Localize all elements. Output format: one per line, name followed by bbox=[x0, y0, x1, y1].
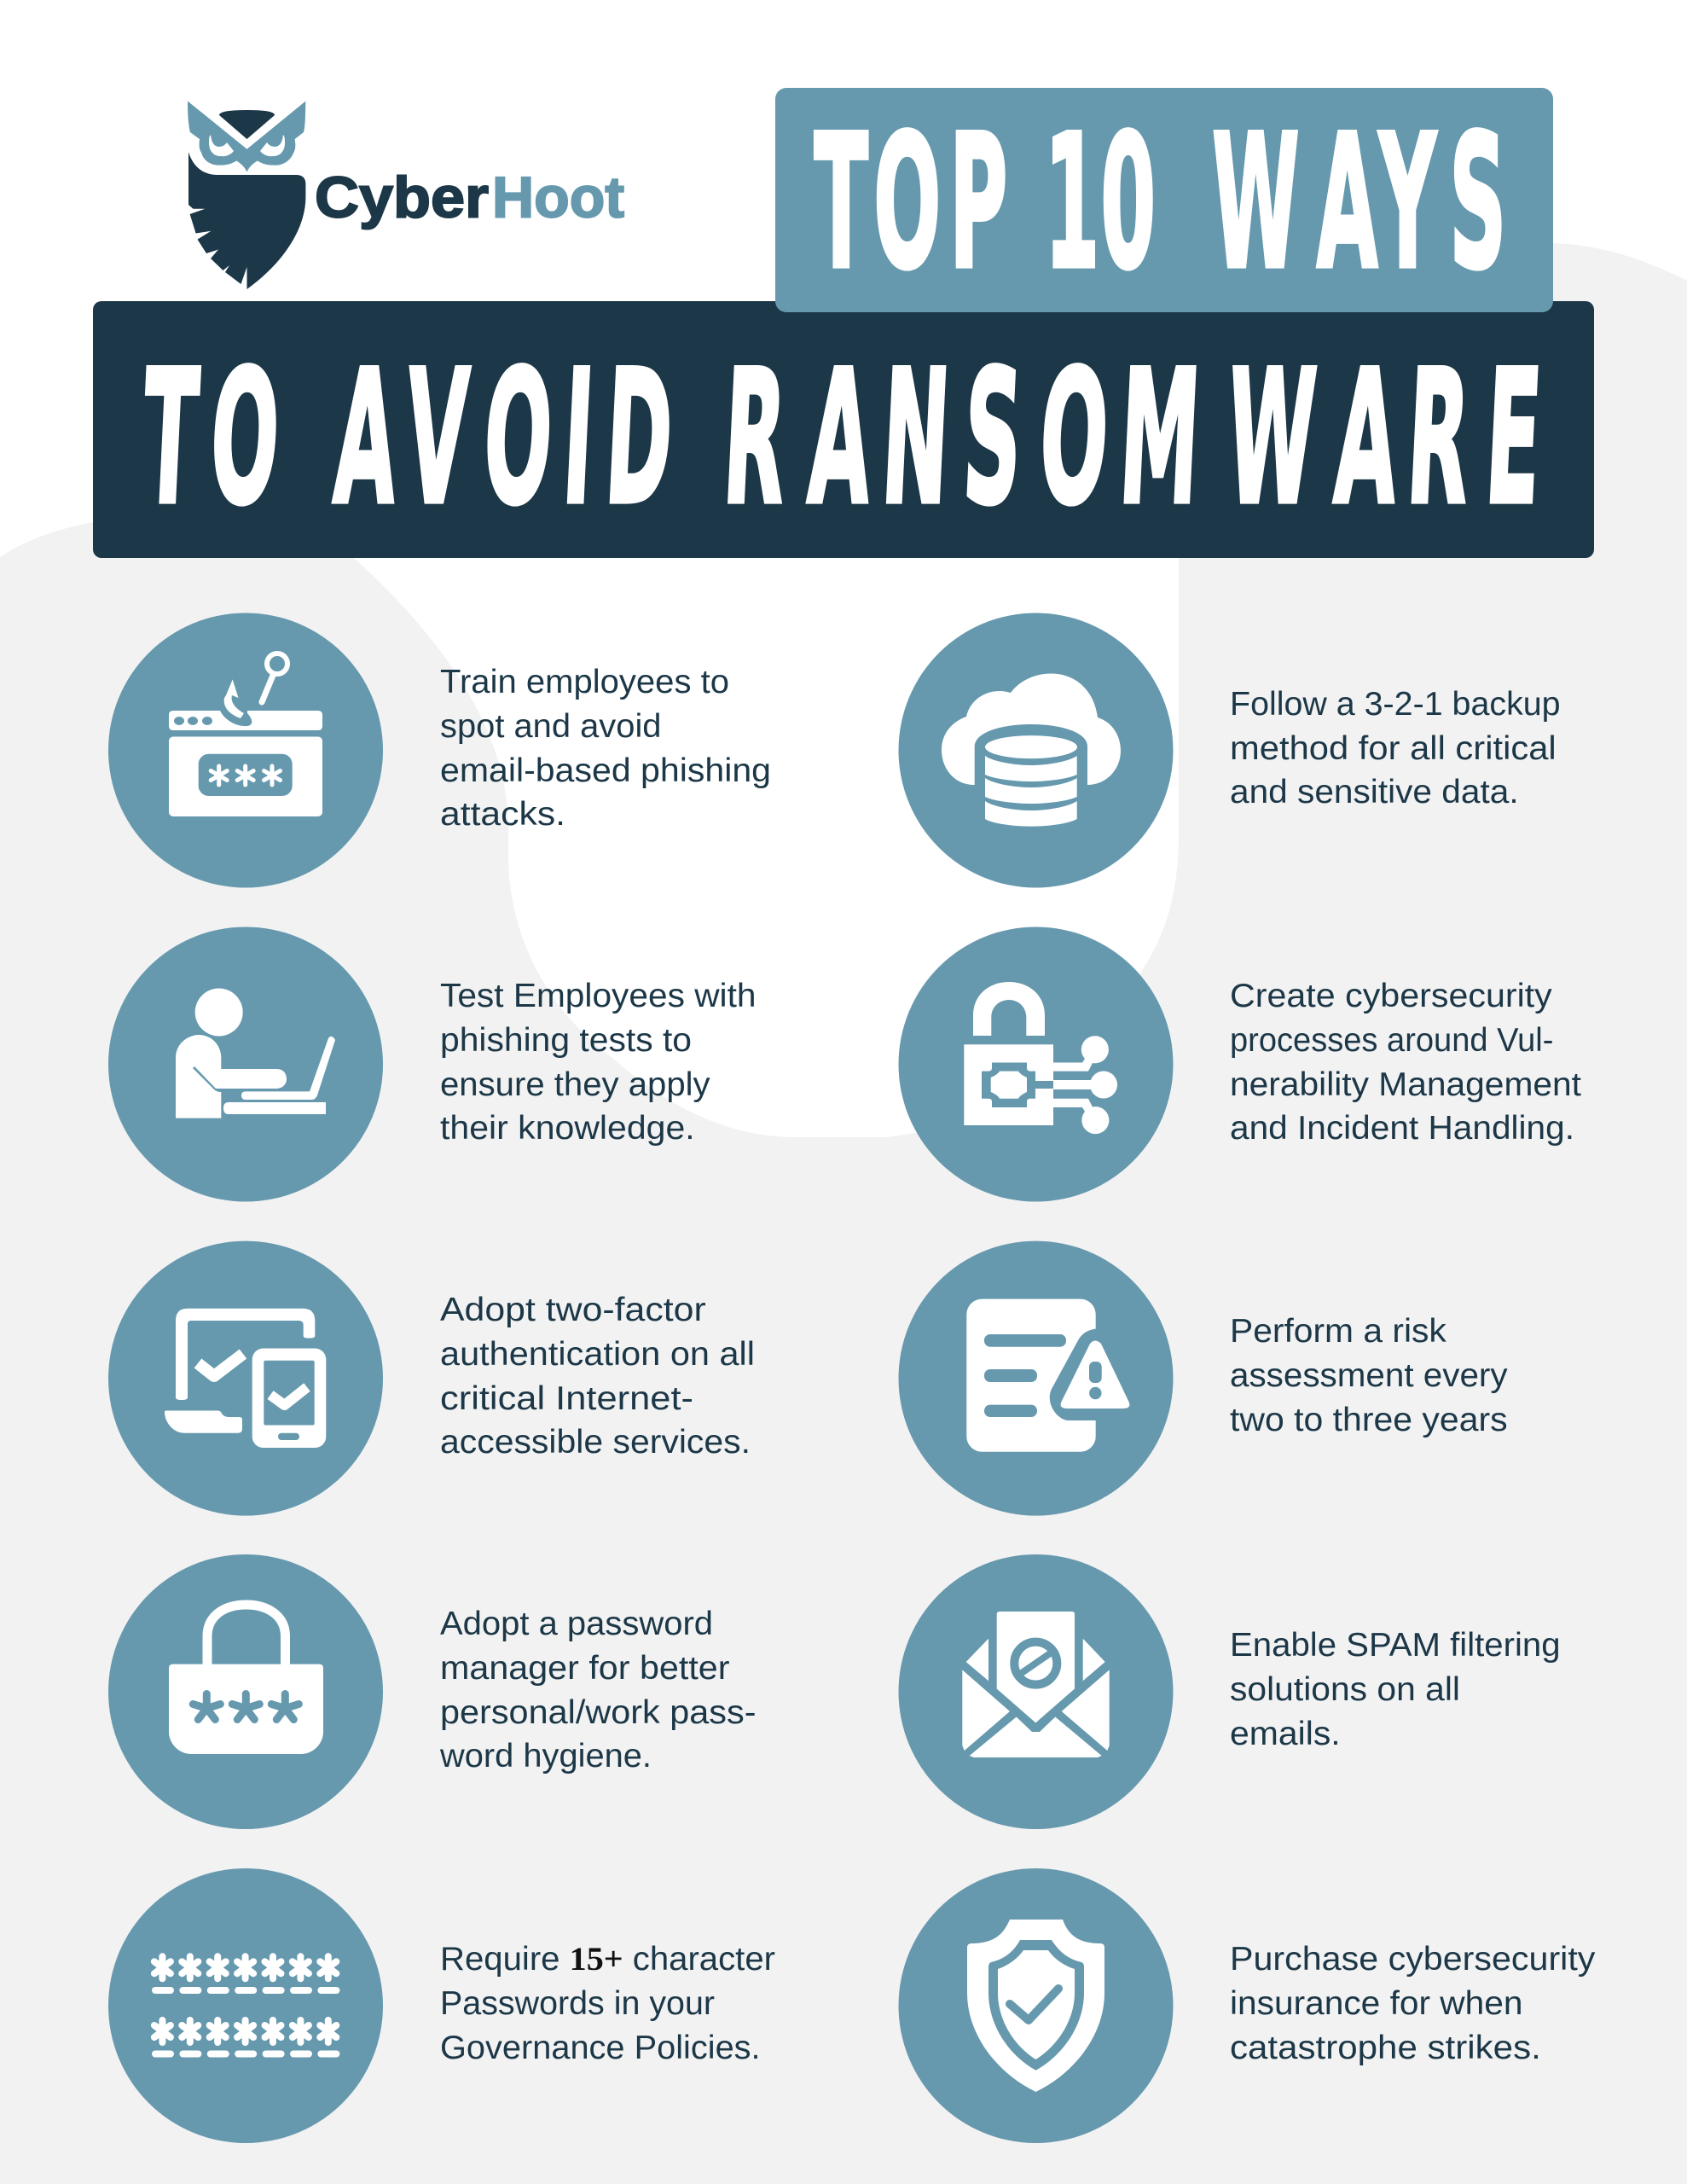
icon: owl shield body bbox=[188, 152, 305, 289]
text: tip 1: attacks. bbox=[440, 796, 565, 833]
text: tip 3 bbox=[440, 1292, 755, 1461]
tip 9: SPAM filtering bbox=[899, 1554, 1561, 1829]
text: tip 9: solutions on all bbox=[1230, 1671, 1460, 1708]
text: tip 5 bbox=[440, 1941, 775, 2066]
title line 2 text: TO AVOID RANSOMWARE bbox=[138, 332, 1545, 546]
text: tip 10: Purchase cybersecurity bbox=[1230, 1941, 1596, 1978]
text: tip 4: manager for better bbox=[440, 1650, 730, 1687]
logo: CyberHoot owl and wordmark bbox=[188, 101, 624, 289]
text: tip 7: and Incident Handling. bbox=[1230, 1110, 1574, 1147]
tip 10: cybersecurity insurance bbox=[899, 1868, 1596, 2143]
text: tip 3: accessible services. bbox=[440, 1424, 751, 1461]
icon: envelope with blocked letter bbox=[899, 1554, 1174, 1829]
icon: document with warning triangle bbox=[899, 1241, 1174, 1516]
text: tip 1: email-based phishing bbox=[440, 752, 771, 789]
text: tip 5: Governance Policies. bbox=[440, 2030, 761, 2066]
icon: cloud database bbox=[899, 613, 1174, 887]
title banner: TO AVOID RANSOMWARE bbox=[93, 301, 1594, 558]
text: tip 1: Train employees to bbox=[440, 664, 729, 700]
text: tip 1 bbox=[440, 664, 771, 833]
text: tip 10: insurance for when bbox=[1230, 1985, 1523, 2022]
icon: phishing hook over browser window bbox=[108, 613, 383, 887]
text: tip 9: emails. bbox=[1230, 1716, 1341, 1752]
icon: shield with checkmark bbox=[899, 1868, 1174, 2143]
text: tip 6 bbox=[1230, 686, 1561, 810]
title line 1 text: TOP 10 WAYS bbox=[815, 96, 1506, 311]
text: tip 1: spot and avoid bbox=[440, 708, 662, 745]
text: tip 2 bbox=[440, 978, 756, 1147]
text: tip 2: ensure they apply bbox=[440, 1066, 710, 1103]
text: tip 6: method for all critical bbox=[1230, 730, 1557, 767]
text: tip 8: Perform a risk bbox=[1230, 1313, 1446, 1350]
icon: person at laptop bbox=[108, 926, 383, 1201]
text: tip 7: processes around Vul- bbox=[1230, 1022, 1553, 1059]
text: tip 9 bbox=[1230, 1627, 1561, 1752]
icon: owl head bbox=[188, 101, 305, 172]
text: tip 7: nerability Management bbox=[1230, 1066, 1581, 1103]
tip 5: long passwords bbox=[108, 1868, 775, 2143]
text: tip 4: word hygiene. bbox=[439, 1738, 652, 1774]
logo wordmark: Hoot bbox=[492, 166, 624, 230]
text: tip 8: assessment every bbox=[1230, 1357, 1508, 1394]
text: tip 3: authentication on all bbox=[440, 1336, 755, 1373]
tip 1: phishing training bbox=[108, 613, 771, 887]
text: tip 7: Create cybersecurity bbox=[1230, 978, 1552, 1014]
text: tip 10: catastrophe strikes. bbox=[1230, 2030, 1541, 2066]
text: tip 4 bbox=[439, 1606, 756, 1774]
text: tip 7 bbox=[1230, 978, 1581, 1147]
icon: circuit padlock bbox=[899, 926, 1174, 1201]
text: tip 4: Adopt a password bbox=[440, 1606, 713, 1642]
text: tip 6: and sensitive data. bbox=[1230, 774, 1519, 810]
tip 2: phishing tests bbox=[108, 926, 756, 1201]
title banner: TOP 10 WAYS bbox=[775, 88, 1553, 312]
icon: masked password rows bbox=[108, 1868, 383, 2143]
text: tip 8: two to three years bbox=[1230, 1402, 1508, 1438]
text: tip 2: their knowledge. bbox=[440, 1110, 695, 1147]
text: tip 2: phishing tests to bbox=[440, 1022, 692, 1059]
text: tip 5: Passwords in your bbox=[440, 1985, 715, 2022]
text: tip 2: Test Employees with bbox=[440, 978, 756, 1014]
text: tip 10 bbox=[1230, 1941, 1596, 2066]
icon: laptop and phone with checkmarks bbox=[108, 1241, 383, 1516]
logo wordmark: Cyber bbox=[315, 166, 489, 230]
tip 7: vulnerability and incident processes bbox=[899, 926, 1581, 1201]
text: tip 6: Follow a 3-2-1 backup bbox=[1230, 686, 1561, 723]
tip 6: 3-2-1 backup bbox=[899, 613, 1561, 887]
tip 8: risk assessment bbox=[899, 1241, 1508, 1516]
tip 4: password manager bbox=[108, 1554, 756, 1829]
text: tip 5: Require 15+ character bbox=[440, 1941, 775, 1978]
text: tip 3: critical Internet- bbox=[440, 1380, 693, 1417]
text: tip 3: Adopt two-factor bbox=[440, 1292, 706, 1328]
tip 3: two-factor authentication bbox=[108, 1241, 755, 1516]
text: tip 8 bbox=[1230, 1313, 1508, 1438]
text: tip 4: personal/work pass- bbox=[440, 1694, 756, 1731]
text: tip 9: Enable SPAM filtering bbox=[1230, 1627, 1561, 1664]
icon: padlock with asterisks bbox=[108, 1554, 383, 1829]
